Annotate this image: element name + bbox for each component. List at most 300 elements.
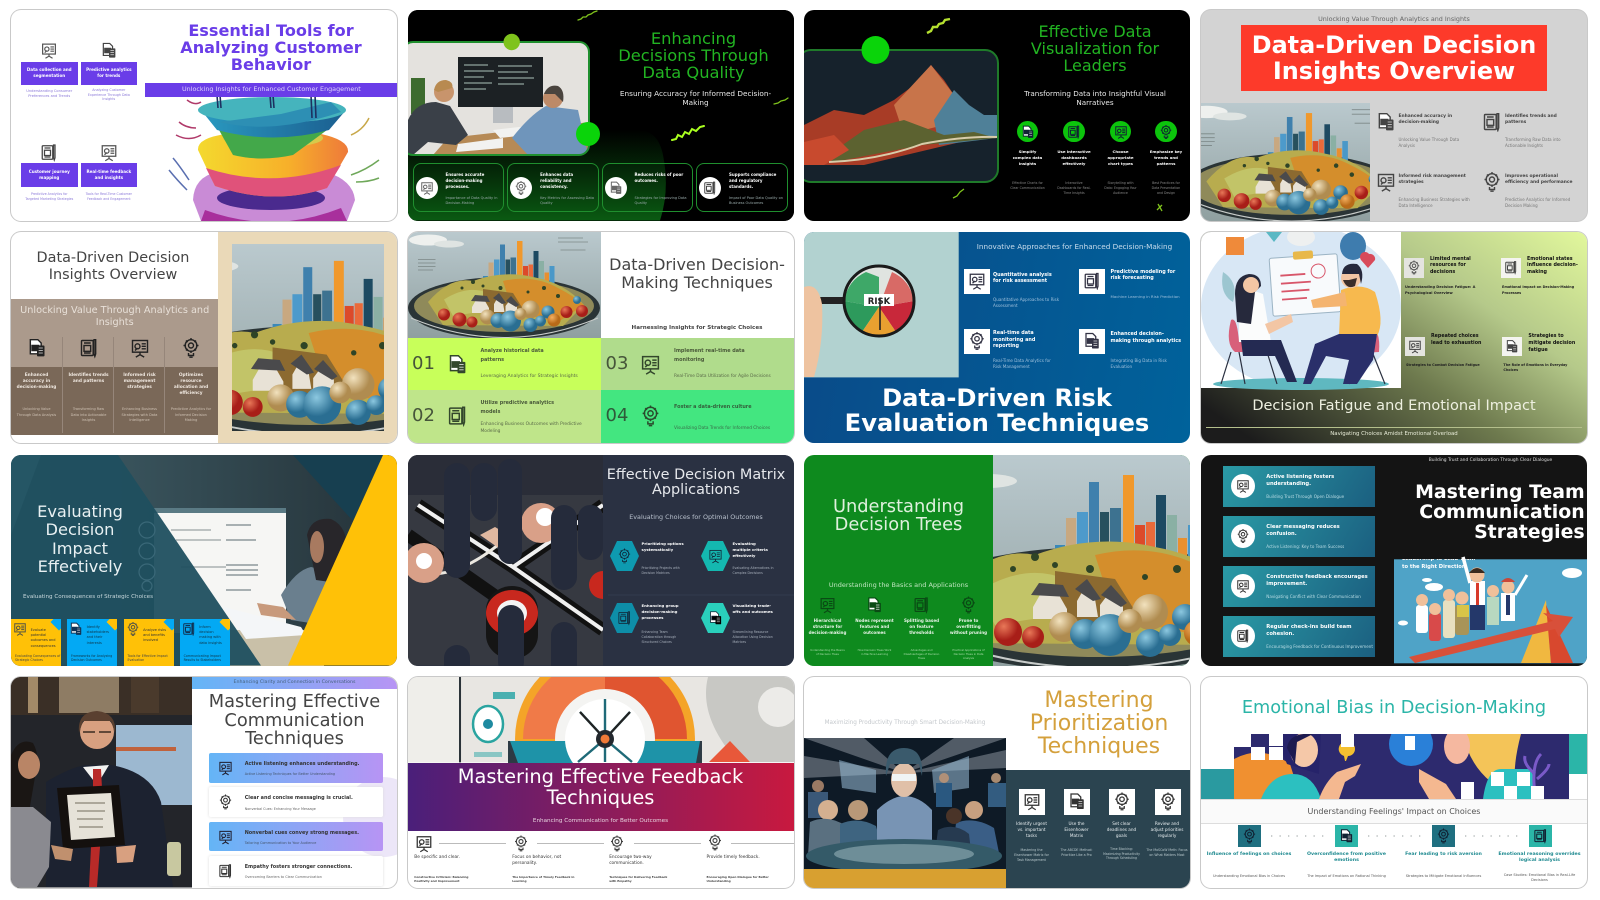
title: Applications — [652, 482, 740, 498]
title: Behavior — [231, 54, 311, 74]
column: eisenhower: Matrix — [1070, 833, 1083, 838]
column: optimizes resources: Predictive Analytics for — [171, 407, 211, 411]
item: dashboards: Interactive — [1065, 181, 1083, 185]
item: repeated choices: Strategies to Combat Decision Fatigue — [1406, 363, 1480, 367]
item: identifies trends: patterns — [1505, 120, 1526, 125]
item: group decision-making: processes — [642, 615, 663, 620]
item: timely feedback: Encouraging Open Dialogue for Better — [706, 875, 769, 879]
subtitle: Understanding the Basics and Applications — [829, 581, 968, 589]
row: active listening: Active Listening Techniques for Better Understanding — [245, 772, 335, 776]
top caption: Unlocking Value Through Analytics and Insights — [1318, 14, 1470, 22]
column: splitting: on feature — [909, 624, 934, 629]
column: nodes: in Machine Learning — [861, 652, 888, 656]
item: focus on behavior — [512, 833, 604, 886]
column: splitting: Disadvantages of Decision — [904, 652, 939, 656]
item: enhanced accuracy — [1378, 113, 1459, 148]
item: quantitative: Assessment — [993, 303, 1018, 308]
column: informed risk: Enhancing Business — [122, 407, 157, 411]
image: data landscape — [408, 232, 601, 338]
item: informed risk: strategies — [1398, 180, 1424, 185]
item: mitigation strategies: Choices — [1503, 368, 1518, 372]
item: operational efficiency — [1484, 172, 1572, 208]
item: active listening: Building Trust Through Open Dialogue — [1266, 494, 1344, 498]
column: overfitting: Analysis — [963, 656, 974, 660]
item: enhances reliability: Enhances data — [540, 172, 573, 177]
title: Decision Fatigue and Emotional Impact — [1252, 398, 1536, 414]
item: enhances reliability: Quality — [540, 201, 553, 205]
title — [1031, 22, 1160, 75]
item: simplify: Simplify — [1019, 149, 1036, 154]
item: prioritizing options — [610, 541, 698, 581]
column: identify urgent: Identify urgent — [1016, 821, 1047, 826]
item 01: Analyze historical data — [480, 348, 544, 354]
item: limited mental resources: Understanding Decision Fatigue: A — [1405, 285, 1475, 289]
item: prioritizing options: Decision Matrices — [642, 571, 670, 575]
title: Impact — [52, 539, 108, 558]
step: fear: Strategies to Mitigate Emotional Influences — [1406, 874, 1481, 878]
icon: hexagon — [610, 541, 638, 571]
item: group decision-making: Collaboration through — [642, 635, 676, 639]
item: enhances reliability: reliability and — [540, 178, 572, 183]
item: enhanced decision-making: Enhanced decision- — [1110, 331, 1164, 337]
column: informed risk: Informed risk — [123, 373, 156, 378]
row: nonverbal cues: Tailoring Communication to Your Audience — [245, 841, 316, 845]
item 04: Foster a data-driven culture — [674, 404, 752, 410]
icon: board — [415, 834, 433, 853]
column: nodes: Nodes represent — [855, 618, 894, 623]
item: be specific — [414, 833, 506, 886]
column: hierarchical structure: structure for — [813, 624, 842, 629]
subtitle: Making — [682, 98, 709, 106]
title band: Mastering Effective Feedback — [458, 765, 743, 788]
column: enhanced accuracy: decision-making — [17, 385, 56, 390]
card: data insights: making with — [199, 635, 221, 639]
subtitle — [620, 88, 771, 106]
column: review priorities: adjust priorities — [1151, 827, 1183, 832]
icon: documents — [1378, 113, 1394, 130]
item 03: Implement real-time data — [674, 348, 745, 354]
item: be specific: Be specific and clear. — [414, 855, 460, 860]
icon: qr chart — [1405, 337, 1425, 356]
divider line — [1206, 427, 1582, 428]
item: chart types: Audience — [1113, 191, 1128, 195]
title: Decision Trees — [835, 514, 962, 535]
item: supports compliance: Supports compliance — [729, 172, 776, 177]
item: real-time monitoring — [964, 329, 1064, 371]
column: informed risk: management — [124, 379, 155, 384]
column: overfitting: Practical Applications of — [952, 648, 985, 652]
item: quantitative — [964, 269, 1064, 311]
icon: chart — [913, 595, 930, 615]
icon: gear tile — [1154, 789, 1180, 815]
subtitle: Ensuring Accuracy for Informed Decision- — [620, 88, 771, 98]
item 01: patterns — [480, 357, 504, 363]
item: predictive analytics: Analyzing Customer — [92, 88, 125, 92]
subtitle: Navigating Choices Amidst Emotional Overload — [1330, 431, 1458, 437]
item: predictive modeling — [1079, 269, 1187, 311]
card: potential outcomes: Evaluating Consequences of — [15, 654, 60, 658]
item: data collection: Data collection and — [27, 67, 72, 72]
item: real-time feedback: Feedback and Engagement — [87, 197, 131, 201]
column: identifies trends: Identifies trends — [68, 373, 109, 378]
item: predictive analytics — [81, 42, 137, 101]
column: identify urgent: Eisenhower Matrix for — [1014, 853, 1049, 857]
card: data insights: decision — [199, 630, 214, 634]
item: emotional states — [1501, 258, 1585, 298]
item: two-way communication: communication. — [609, 861, 644, 866]
item: operational efficiency: efficiency and performance — [1505, 180, 1572, 185]
icon: magnifier report — [866, 595, 883, 615]
title banner — [1241, 25, 1547, 91]
icon: board — [819, 595, 836, 615]
column: identifies trends: Insights — [82, 418, 95, 422]
item: data collection: segmentation — [33, 73, 65, 78]
icon: white circle — [1231, 574, 1255, 598]
column: hierarchical structure: decision-making — [809, 630, 846, 635]
panel: Essential Tools for Analyzing Customer Behavior — [11, 10, 397, 220]
column: optimizes resources — [164, 337, 218, 433]
item: emphasize trends — [1150, 121, 1182, 195]
icon: dashboard — [42, 44, 56, 59]
item: limited mental resources: Limited mental — [1430, 256, 1471, 262]
card: potential outcomes: consequences — [31, 644, 56, 648]
column: optimizes resources: Informed Decision — [175, 413, 207, 417]
item: supports compliance: Impact of Poor Data Quality on — [729, 196, 783, 200]
item: chart types: Storytelling with — [1107, 181, 1134, 185]
panel: Emotional Bias in Decision-Making — [1201, 677, 1587, 888]
item: mitigation strategies — [1501, 337, 1585, 377]
item: enhanced accuracy: Unlocking Value Through Data — [1398, 137, 1459, 142]
card: stakeholders: Frameworks for Analyzing — [71, 654, 112, 658]
item 03 — [600, 338, 794, 390]
icon: documents — [102, 42, 116, 58]
column: informed risk — [113, 337, 164, 433]
caption: Maximizing Productivity Through Smart Decision-Making — [825, 720, 985, 726]
title: Communication — [1419, 501, 1585, 523]
item: clear messaging: confusion. — [1266, 531, 1297, 537]
card: potential outcomes — [11, 619, 61, 666]
item: enhanced decision-making: making through analytics — [1110, 338, 1181, 344]
item: ensures accurate: processes. — [446, 184, 470, 189]
column: optimizes resources: efficiency — [179, 391, 203, 396]
item: enhanced accuracy: decision-making — [1398, 120, 1439, 125]
icon: gear — [640, 405, 660, 427]
item: constructive feedback: improvement. — [1266, 581, 1307, 587]
title: Strategies — [1474, 521, 1585, 543]
icon: hexagon — [700, 603, 730, 633]
column: eisenhower: Prioritize Like a Pro — [1061, 853, 1092, 857]
card: risks and benefits — [124, 619, 174, 666]
item 01: Leveraging Analytics for Strategic Insights — [480, 374, 578, 379]
card: risks and benefits: Evaluation — [128, 658, 144, 662]
item: constructive feedback: Constructive feedback encourages — [1266, 574, 1368, 580]
item: real-time feedback — [81, 145, 137, 201]
card: stakeholders: Identify — [87, 625, 100, 629]
title: Techniques — [245, 728, 344, 749]
title band — [408, 763, 794, 831]
item 04: 04 — [606, 405, 628, 426]
icon: quantitative analysis — [964, 269, 990, 294]
item: data collection: Preferences and Trends — [28, 94, 70, 98]
item: multiple criteria — [700, 541, 790, 581]
column: informed risk: Intelligence — [129, 418, 150, 422]
card: data insights: Inform — [199, 625, 211, 629]
item: focus on behavior: personality. — [512, 861, 537, 866]
row: active listening — [209, 753, 383, 783]
item 02: 02 — [412, 405, 435, 426]
title: Decision — [46, 520, 114, 539]
item 04 — [600, 390, 794, 443]
item: timely feedback — [706, 833, 794, 886]
item: quantitative: for risk assessment — [993, 278, 1047, 284]
icon: green circle — [1155, 121, 1177, 142]
column: hierarchical structure: Understanding the Basics — [810, 648, 845, 652]
item: trade-offs: offs and outcomes — [732, 609, 773, 614]
column: review priorities: on What Matters Most — [1149, 853, 1185, 857]
icon: board — [1378, 174, 1394, 192]
column: hierarchical structure: Hierarchical — [814, 618, 841, 623]
item 02: Enhancing Business Outcomes with Predictive — [480, 422, 582, 427]
step: fear — [1395, 825, 1492, 883]
item: simplify: Clear Communication — [1010, 186, 1045, 190]
icon: tile — [1432, 825, 1455, 847]
item: simplify — [1010, 121, 1045, 190]
dark panel — [11, 367, 218, 435]
row: nonverbal cues — [209, 822, 383, 851]
illustration: layered funnel — [168, 97, 380, 221]
column: deadlines: Time Blocking: — [1110, 847, 1133, 851]
icon: gear — [960, 595, 977, 615]
item: simplify: Effective Charts for — [1012, 181, 1043, 185]
item: repeated choices — [1404, 337, 1494, 377]
top strip: Enhancing Clarity and Connection in Conversations — [234, 680, 355, 685]
image: data landscape — [232, 244, 384, 431]
item: clear messaging: Active Listening: Key to Team Success — [1266, 544, 1344, 548]
icon: white circle — [1231, 624, 1255, 648]
item: focus on behavior: Learning — [512, 879, 527, 883]
icon: tile — [1528, 825, 1552, 847]
item: real-time monitoring: monitoring and — [993, 337, 1035, 343]
column: overfitting: Prone to — [959, 618, 978, 623]
top strip — [192, 677, 397, 689]
column: splitting: thresholds — [909, 630, 934, 635]
subtitle: Evaluating Consequences of Strategic Choices — [23, 594, 153, 600]
item: reduces risks: Strategies for Improving Data — [634, 196, 687, 200]
item: identifies trends: Identifies trends and — [1505, 114, 1557, 119]
icon: notebook — [42, 144, 56, 162]
card: risks and benefits: Analyze risks — [143, 628, 166, 632]
dark panel — [1006, 770, 1190, 888]
title: Effectively — [38, 557, 122, 576]
column: enhanced accuracy: Through Data Analysis — [17, 413, 56, 417]
title: Leaders — [1063, 56, 1127, 75]
icon: board — [13, 622, 27, 636]
item: enhanced decision-making: Evaluation — [1110, 364, 1132, 369]
icon: chart — [182, 622, 196, 636]
icon: board — [218, 828, 233, 846]
illustration: two people with clipboard — [1201, 232, 1587, 443]
title: Decisions Through — [618, 46, 769, 64]
item: prioritizing options: systematically — [642, 547, 673, 552]
item: constructive feedback: Navigating Conflict with Clear Communication — [1266, 594, 1361, 598]
image caption — [1402, 559, 1482, 572]
column: identify urgent — [1009, 789, 1054, 865]
title: Techniques — [1038, 734, 1160, 759]
panel: Mastering Team Communication Strategies — [1201, 455, 1587, 666]
item: limited mental resources: resources for — [1430, 263, 1466, 268]
item: limited mental resources: Psychological Overview — [1405, 290, 1453, 294]
title — [180, 20, 362, 74]
item: ensures accurate — [412, 163, 504, 212]
item: limited mental resources: decisions — [1430, 270, 1455, 275]
icon: report — [604, 176, 626, 198]
image: meeting photo with decorations — [408, 10, 794, 220]
step: overconfidence: The Impact of Emotions on Rational Thinking — [1307, 874, 1386, 878]
item: customer journey — [21, 144, 78, 201]
item: mitigation strategies: Strategies to — [1528, 334, 1564, 339]
icon: report — [102, 145, 116, 162]
item: trade-offs: Allocation Using Decision — [732, 635, 773, 639]
column: eisenhower — [1054, 789, 1099, 865]
item: chart types — [1104, 121, 1137, 195]
column: deadlines: Through Scheduling — [1106, 856, 1137, 860]
icon: gear — [1484, 172, 1500, 192]
item 03: 03 — [606, 353, 628, 374]
column: deadlines: Maximizing Productivity — [1103, 852, 1140, 856]
icon: board — [132, 340, 148, 358]
title: Analyzing Customer — [180, 38, 362, 56]
title — [1006, 690, 1192, 758]
item 02 — [408, 390, 600, 443]
item: real-time monitoring: Real-Time Data Analytics for — [993, 358, 1051, 363]
image: 3D data landscape — [804, 18, 1162, 212]
card: data insights: Results to Stakeholders — [184, 658, 221, 662]
panel: Data-Driven Decision-Making Techniques — [408, 232, 794, 443]
panel: Mastering Effective Feedback Techniques — [408, 677, 794, 888]
item 03: monitoring — [674, 357, 704, 363]
column: optimizes resources: Making — [185, 418, 197, 422]
column: review priorities — [1144, 789, 1190, 865]
icon: dashboard — [416, 176, 438, 198]
item: regular check-ins: Encouraging Feedback for Continuous Improvement — [1266, 644, 1373, 648]
column: deadlines: goals — [1116, 833, 1127, 838]
title — [804, 498, 993, 535]
column: informed risk: strategies — [127, 385, 152, 390]
step: emotional reasoning: Emotional reasoning overrides — [1498, 852, 1581, 857]
item: real-time monitoring: Risk Management — [993, 364, 1030, 369]
title: Data-Driven Decision — [37, 250, 189, 266]
item: emphasize trends: and Design — [1157, 191, 1175, 195]
card: potential outcomes: potential — [31, 633, 46, 637]
item: chart types: Data: Engaging Your — [1104, 186, 1137, 190]
column: optimizes resources: Optimizes — [179, 373, 203, 378]
item: emotional states: influence decision- — [1527, 263, 1578, 268]
item: ensures accurate: Ensures accurate — [446, 172, 484, 177]
subtitle panel — [11, 299, 218, 367]
panel: Effective Decision Matrix Applications — [408, 455, 794, 666]
column: enhanced accuracy: Enhanced — [25, 373, 48, 378]
item: be specific: Constructive Criticism: Balancing — [414, 875, 468, 879]
title banner: Data-Driven Decision — [1252, 31, 1536, 59]
column: review priorities: regularly — [1158, 833, 1176, 838]
item: group decision-making: Structured Choices — [642, 640, 672, 644]
title: Mastering Team — [1415, 481, 1585, 503]
dotted connectors — [1249, 833, 1541, 839]
item: predictive analytics: Insights — [102, 97, 115, 101]
item: be specific: Positivity and Improvement — [414, 879, 460, 883]
icon: board — [642, 356, 660, 375]
subtitle band — [1201, 799, 1587, 824]
item: identifies trends: Transforming Raw Data into — [1505, 137, 1561, 142]
step: emotional reasoning: Decisions — [1531, 878, 1548, 882]
item: regular check-ins: Regular check-ins build team — [1266, 624, 1352, 630]
item: constructive feedback — [1223, 566, 1374, 607]
title — [192, 693, 397, 748]
icon: documents — [450, 355, 466, 374]
item: data collection: Understanding Consumer — [26, 89, 72, 93]
item 04: Visualizing Data Trends for Informed Choices — [674, 426, 770, 431]
item: emotional states: Processes — [1502, 290, 1521, 294]
item: supports compliance — [696, 163, 788, 212]
title: Communication — [224, 710, 365, 730]
row: empathy: Empathy fosters stronger connections. — [245, 864, 352, 870]
title: Evaluation Techniques — [845, 409, 1149, 437]
item: real-time feedback: and insights — [95, 174, 123, 180]
icon: figure — [1501, 258, 1521, 278]
column: optimizes resources: resource — [180, 379, 202, 384]
item: active listening — [1223, 466, 1374, 507]
column: review priorities: The MoSCoW Meth: Focus — [1146, 848, 1188, 852]
column: identify urgent: vs. important — [1017, 827, 1046, 832]
icon: notebook — [1484, 113, 1500, 132]
icon: green circle — [1063, 121, 1085, 142]
subtitle — [1024, 89, 1166, 107]
column: eisenhower: Eisenhower — [1064, 827, 1089, 832]
icon: white circle — [1231, 524, 1255, 548]
row: empathy — [209, 856, 383, 886]
item: quantitative: Quantitative Approaches to Risk — [993, 297, 1059, 302]
column: nodes — [851, 595, 898, 663]
panel: Decision Fatigue and Emotional Impact — [1201, 232, 1587, 443]
item: active listening: Active listening fosters — [1266, 474, 1334, 480]
icon: bulb — [513, 834, 529, 853]
image: risk magnifier: RISK — [868, 297, 891, 307]
item: emotional states: Emotional Impact on Decision-Making — [1502, 285, 1574, 289]
column: nodes: features and — [860, 624, 889, 629]
column: eisenhower: The ABCDE Method: — [1060, 848, 1092, 852]
column: overfitting: without pruning — [950, 630, 987, 635]
column: enhanced accuracy: Unlocking Value — [22, 407, 50, 411]
item: reduces risks: Quality — [634, 201, 647, 205]
item: dashboards — [1057, 121, 1091, 195]
column: nodes: outcomes — [863, 630, 886, 635]
title: Essential Tools for — [188, 20, 354, 40]
item: prioritizing options: Prioritizing options — [642, 541, 684, 546]
title: Making Techniques — [621, 273, 773, 292]
item: repeated choices: Repeated choices — [1431, 334, 1479, 339]
panel: Enhancing Decisions Through Data Quality — [408, 10, 794, 220]
subtitle: Transforming Data into Insightful Visual — [1024, 89, 1166, 98]
item: ensures accurate: decision-making — [446, 178, 482, 183]
item: enhanced decision-making: Integrating Big Data in Risk — [1110, 358, 1167, 363]
item: emphasize trends: patterns — [1157, 161, 1175, 166]
step: emotional reasoning: logical analysis — [1519, 858, 1560, 863]
card: stakeholders: stakeholders — [87, 630, 109, 634]
title: Evaluating — [37, 502, 123, 520]
column: overfitting — [945, 595, 992, 663]
item: dashboards: effectively — [1062, 161, 1085, 166]
title: Enhancing — [651, 28, 736, 48]
